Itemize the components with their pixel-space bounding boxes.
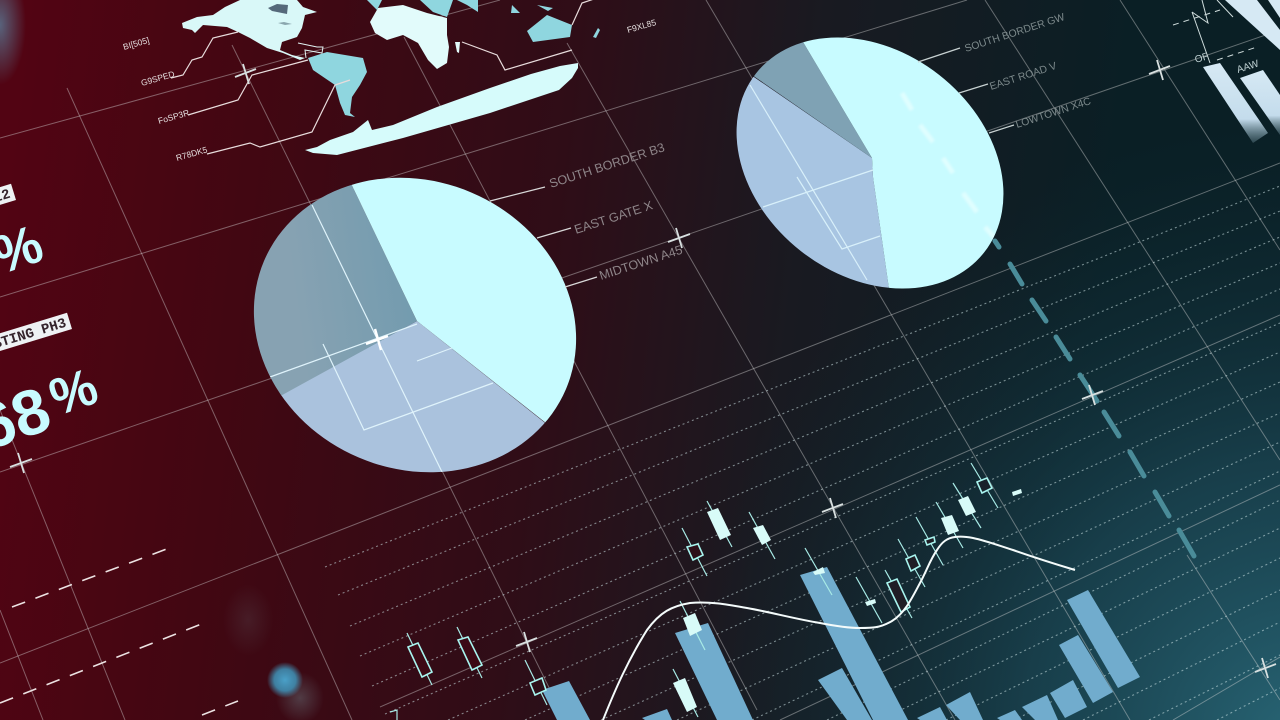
- map labels: BI[505]: [122, 35, 150, 52]
- map labels: G9SPED: [140, 69, 176, 88]
- candle wicks: [390, 463, 998, 720]
- south america: [308, 52, 367, 117]
- top right bar chart fragment: [1173, 0, 1280, 143]
- bar labels: AAW: [1236, 58, 1261, 76]
- dotted chart gridlines: [325, 186, 1280, 720]
- map labels: FoSP3R: [157, 107, 190, 126]
- pie 2 inner lines: [750, 85, 880, 280]
- pie 2 slice: grey: [754, 42, 872, 158]
- antarctica: [305, 63, 578, 155]
- pie 2 labels: LOWTOWN X4C: [1015, 96, 1093, 131]
- map labels: [122, 17, 657, 163]
- left stat: first percent: [0, 184, 50, 286]
- madagascar: [455, 42, 460, 53]
- pie 1 labels: EAST GATE X: [573, 198, 655, 237]
- map labels: R78DK5: [175, 144, 209, 163]
- pie 1 leader lines: [490, 187, 597, 287]
- bar chart: [542, 567, 1140, 720]
- candlestick chart: [390, 463, 1022, 720]
- bars: [1203, 63, 1268, 143]
- pie 1 slice: grey: [254, 184, 417, 396]
- pie 2 labels: SOUTH BORDER GW: [964, 12, 1066, 55]
- caribbean outline: [298, 43, 323, 58]
- pie 1 labels: [548, 140, 684, 283]
- zigzag line: [1192, 0, 1233, 63]
- eurasia fragments: [367, 0, 553, 17]
- pie chart 1: [254, 143, 682, 472]
- hollow candles: [408, 478, 992, 695]
- filled candles: [673, 489, 1022, 712]
- pie 1 slice: blue: [280, 321, 545, 472]
- pie 2 labels: EAST ROAD V: [989, 61, 1058, 93]
- great lakes: [278, 22, 292, 25]
- pie 1 inner lines: [270, 205, 493, 472]
- world map with callout leaders: [122, 0, 657, 163]
- dashed lines bottom left: [0, 547, 238, 715]
- pie 2 slice: blue: [736, 76, 889, 288]
- pie 2 slice: light: [803, 38, 1004, 288]
- left stat: second percent: %: [42, 358, 105, 427]
- left stat: second percent: [0, 313, 105, 464]
- white trend curve: [603, 537, 1075, 720]
- pie 1 labels: SOUTH BORDER B3: [548, 140, 666, 191]
- leader lines: [171, 0, 600, 154]
- pie 2 leader lines: [918, 48, 1014, 133]
- bar labels: OF: [1194, 51, 1210, 66]
- pie 1 labels: MIDTOWN A45: [598, 243, 684, 283]
- pie chart 2: [736, 13, 1090, 288]
- pie 2 labels: [964, 12, 1093, 131]
- diagonal dashed teal trend: [995, 241, 1194, 556]
- lens glare: [223, 584, 324, 720]
- map labels: F9XL85: [626, 17, 657, 35]
- hudson bay: [268, 4, 288, 14]
- bar labels: [1194, 51, 1261, 76]
- dashed markers: [1173, 10, 1257, 60]
- pie 2 highlight dashes: [902, 93, 995, 238]
- australia: [527, 15, 572, 42]
- new zealand: [593, 28, 600, 38]
- north america: [182, 0, 317, 60]
- africa: [370, 5, 449, 69]
- pie 1 slice: light: [352, 178, 576, 422]
